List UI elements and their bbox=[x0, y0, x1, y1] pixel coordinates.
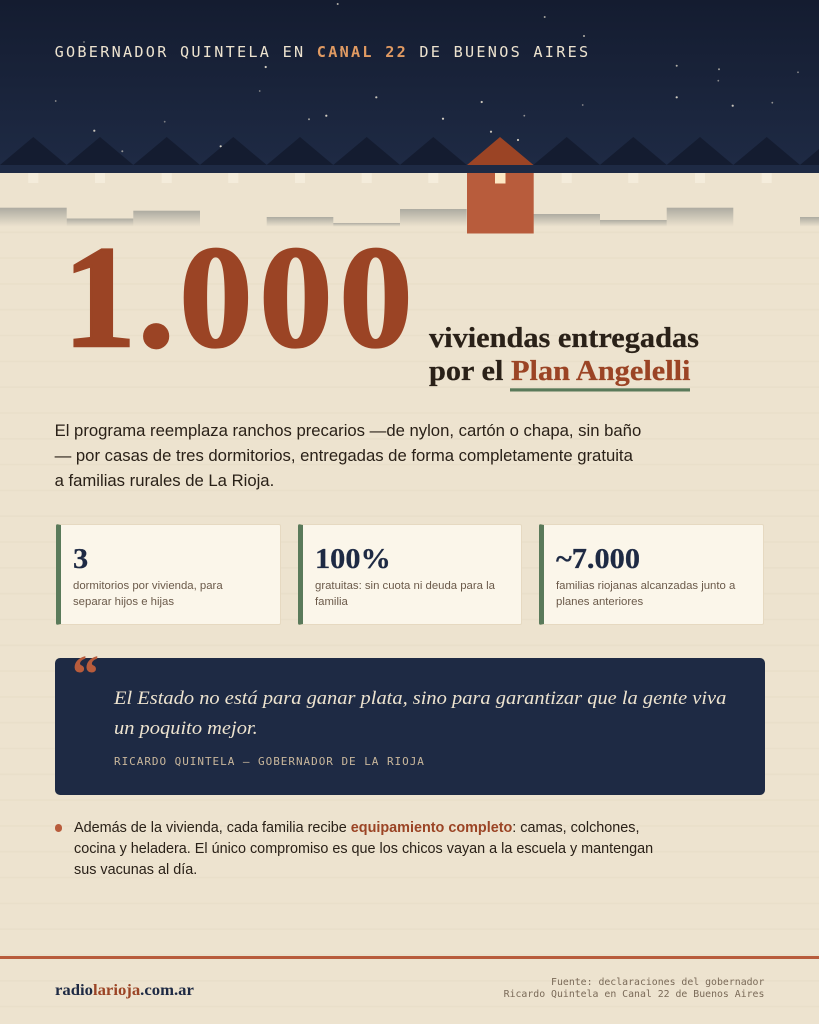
bullet text: cocina y heladera. El único compromiso es que los chicos vayan a la escuela y mantengan bbox=[74, 841, 653, 857]
stat description: dormitorios por vivienda, para bbox=[73, 580, 223, 592]
stat value: 3 bbox=[73, 544, 88, 575]
stars bbox=[55, 3, 799, 152]
subtitle: por el Plan Angelelli bbox=[429, 356, 690, 387]
ground shadows bbox=[0, 208, 819, 227]
stat description: planes anteriores bbox=[556, 596, 643, 608]
stat description: gratuitas: sin cuota ni deuda para la bbox=[315, 580, 495, 592]
horizon band bbox=[0, 165, 819, 173]
footer source: Ricardo Quintela en Canal 22 de Buenos Aires bbox=[504, 989, 764, 1000]
stat description: separar hijos e hijas bbox=[73, 596, 174, 608]
stat description bbox=[556, 580, 736, 608]
quote text: El Estado no está para ganar plata, sino para garantizar que la gente viva bbox=[114, 688, 726, 709]
quote panel bbox=[55, 658, 765, 795]
quote text: un poquito mejor. bbox=[114, 718, 258, 739]
bullet dot bbox=[55, 824, 62, 832]
stat card: 100% bbox=[298, 524, 522, 625]
highlighted house bbox=[467, 137, 534, 234]
intro paragraph: — por casas de tres dormitorios, entregadas de forma completamente gratuita bbox=[55, 446, 633, 465]
footer brand: radiolarioja.com.ar bbox=[55, 982, 193, 999]
stat card: 7000 bbox=[539, 524, 764, 625]
sky bbox=[0, 0, 819, 165]
bullet text: sus vacunas al día. bbox=[74, 862, 197, 878]
subtitle bbox=[428, 323, 699, 387]
stat description bbox=[73, 580, 223, 608]
stat card: 3 bbox=[56, 524, 281, 625]
house windows row bbox=[28, 173, 772, 183]
footer rule bbox=[0, 956, 819, 959]
header title: GOBERNADOR QUINTELA EN CANAL 22 DE BUENOS AIRES bbox=[55, 43, 590, 61]
stat value: ~7.000 bbox=[556, 544, 640, 575]
rooftops bbox=[0, 137, 819, 165]
header night scene bbox=[0, 0, 819, 234]
quote text bbox=[114, 688, 726, 739]
intro paragraph: a familias rurales de La Rioja. bbox=[55, 471, 274, 490]
subtitle underline bbox=[510, 388, 690, 392]
intro paragraph bbox=[54, 421, 641, 490]
intro paragraph: El programa reemplaza ranchos precarios —de nylon, cartón o chapa, sin baño bbox=[55, 421, 641, 440]
stat value: 100% bbox=[315, 544, 391, 575]
stat description: familias riojanas alcanzadas junto a bbox=[556, 580, 735, 592]
footer source: Fuente: declaraciones del gobernador bbox=[551, 977, 764, 988]
quote attribution: RICARDO QUINTELA — GOBERNADOR DE LA RIOJA bbox=[114, 755, 425, 768]
stat description bbox=[315, 580, 495, 608]
big number: 1.000 bbox=[63, 216, 419, 378]
bullet text bbox=[74, 820, 653, 878]
bullet text: Además de la vivienda, cada familia recibe equipamiento completo: camas, colchones, bbox=[74, 820, 639, 836]
subtitle: viviendas entregadas bbox=[429, 323, 699, 354]
footer source bbox=[504, 977, 764, 1000]
stat description: familia bbox=[315, 596, 348, 608]
quote mark: “ bbox=[72, 644, 99, 704]
